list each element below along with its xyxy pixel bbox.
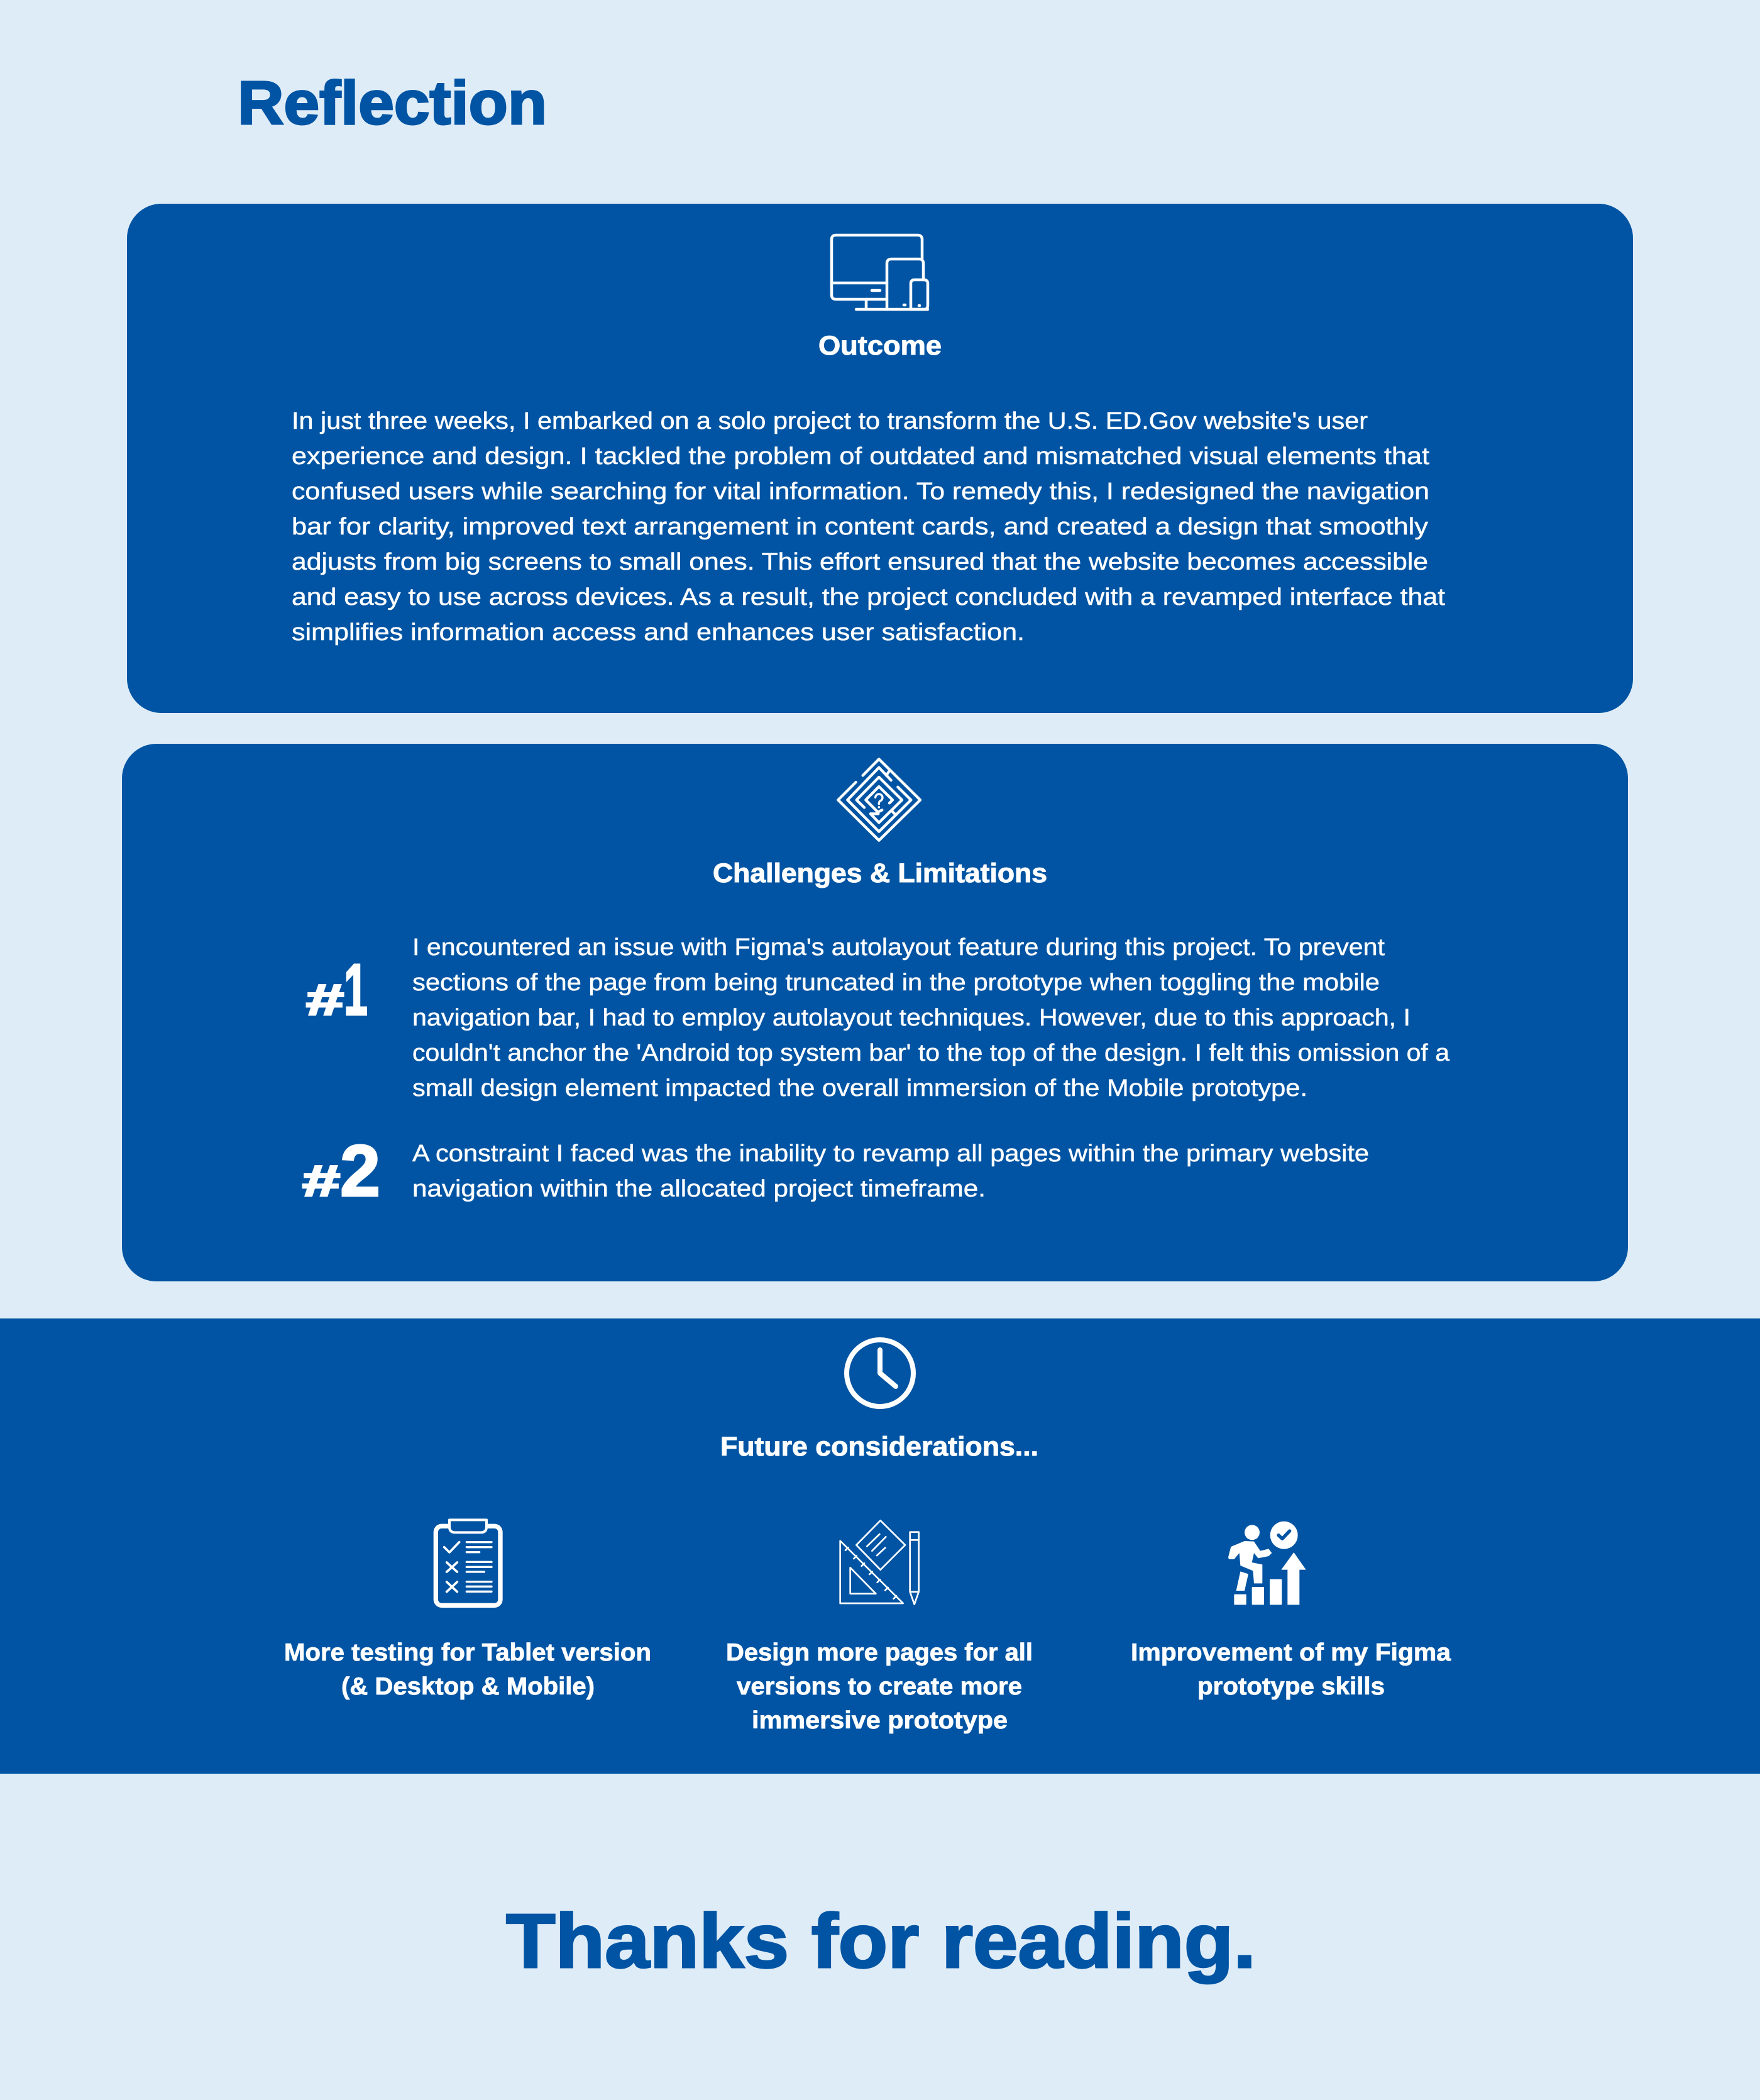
icon: clipboard checklist (436, 1520, 500, 1605)
panel: future considerations (0, 1318, 1760, 1774)
text block: challenge 1: couldn't anchor the 'Android top system bar' to the top of the design. I felt this omission of a (412, 1040, 1450, 1066)
caption: testing (284, 1639, 651, 1700)
text block: outcome paragraph: simplifies information access and enhances user satisfaction. (292, 619, 1025, 646)
heading: Outcome: Outcome (818, 331, 942, 361)
text block: challenge 1: navigation bar, I had to employ autolayout techniques. However, due to this approach, I (412, 1005, 1411, 1031)
icon: clock (847, 1340, 913, 1406)
text block: challenge 2: A constraint I faced was the inability to revamp all pages within the primary website (412, 1141, 1369, 1167)
caption: more pages (726, 1639, 1033, 1734)
caption: more pages: versions to create more (737, 1673, 1022, 1700)
text block: outcome paragraph: confused users while searching for vital information. To remedy this, I redesigned the navigation (292, 478, 1429, 505)
closing heading: Thanks for reading: Thanks for reading. (506, 1898, 1256, 1984)
number: challenge 2: 2 (340, 1130, 380, 1212)
caption: testing: More testing for Tablet version (284, 1639, 651, 1666)
icon: maze with question mark (838, 759, 920, 841)
caption: more pages: Design more pages for all (726, 1639, 1033, 1666)
heading: Challenges & Limitations: Challenges & Limitations (713, 858, 1047, 888)
caption: Figma skills: prototype skills (1197, 1673, 1385, 1700)
text block: outcome paragraph: bar for clarity, improved text arrangement in content cards, and created a design that smoothly (292, 514, 1428, 540)
icon: design tools (840, 1520, 919, 1605)
icon: devices (832, 235, 928, 309)
text block: challenge 2: navigation within the allocated project timeframe. (412, 1176, 986, 1202)
caption: more pages: immersive prototype (752, 1707, 1008, 1734)
icon: person climbing bars (1228, 1522, 1306, 1605)
caption: Figma skills: Improvement of my Figma (1131, 1639, 1451, 1666)
caption: Figma skills (1131, 1639, 1451, 1700)
text block: outcome paragraph: experience and design. I tackled the problem of outdated and mismatched visual elements that (292, 443, 1430, 470)
number: challenge 1: 1 (344, 949, 368, 1031)
text block: challenge 1: I encountered an issue with Figma's autolayout feature during this project. To prevent (412, 934, 1385, 961)
number: challenge 1: # (306, 975, 344, 1024)
heading: Future considerations: Future considerations... (720, 1432, 1038, 1462)
text block: outcome paragraph: In just three weeks, I embarked on a solo project to transform the U.S. ED.Gov website's user (292, 408, 1368, 434)
panel: outcome (127, 204, 1633, 713)
number: challenge 2: # (302, 1156, 340, 1205)
text block: outcome paragraph (292, 408, 1445, 646)
caption: testing: (& Desktop & Mobile) (341, 1673, 595, 1700)
text block: challenge 1 (412, 934, 1450, 1102)
number: challenge 2 (302, 1130, 380, 1212)
panel: challenges and limitations (122, 744, 1628, 1281)
title: Reflection: Reflection (238, 69, 547, 137)
text block: challenge 1: small design element impacted the overall immersion of the Mobile prototype. (412, 1075, 1307, 1102)
text block: outcome paragraph: and easy to use across devices. As a result, the project concluded with a revamped interface that (292, 584, 1445, 611)
text block: challenge 2 (412, 1141, 1369, 1202)
text block: challenge 1: sections of the page from being truncated in the prototype when toggling the mobile (412, 970, 1380, 996)
number: challenge 1 (306, 949, 368, 1031)
text block: outcome paragraph: adjusts from big screens to small ones. This effort ensured that the website becomes accessible (292, 549, 1428, 575)
